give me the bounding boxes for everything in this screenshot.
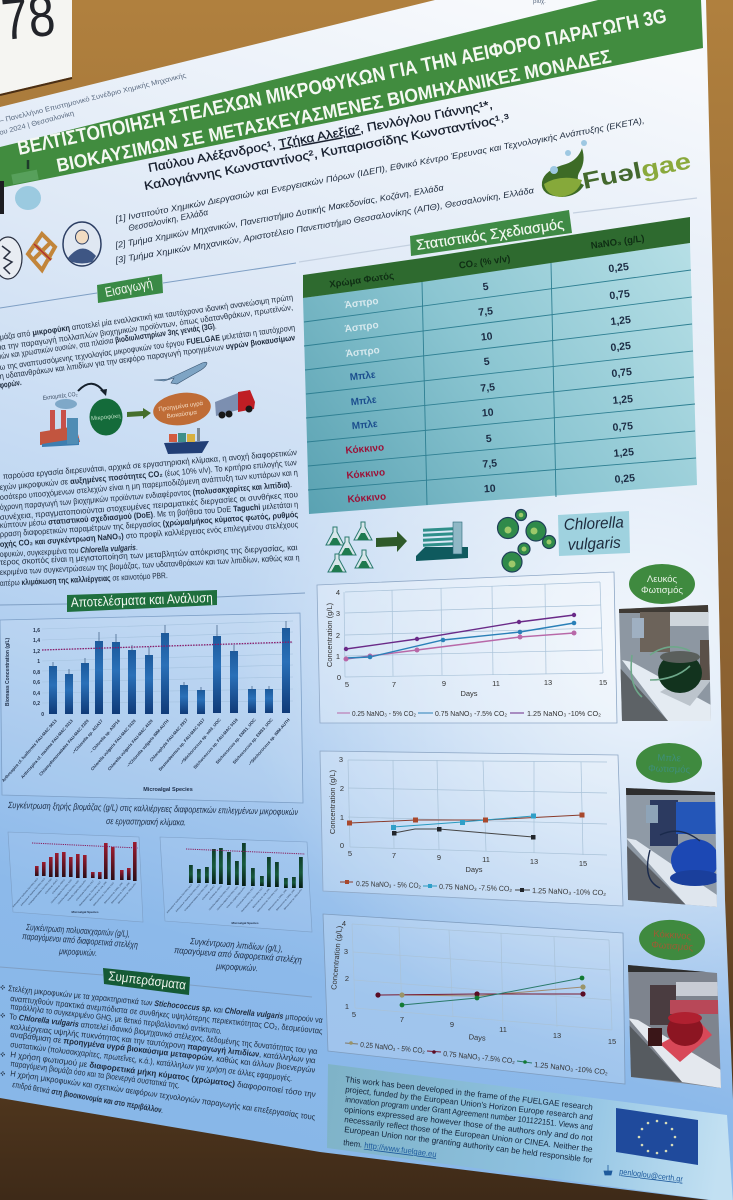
bar chart: biomass concentration: 1,6 <box>33 628 40 634</box>
label: blue lighting <box>636 743 702 783</box>
logo: Fuelgae: Fuəl gae <box>580 147 693 194</box>
bar chart: lipids: Chlorella sp. ASP14 <box>208 884 223 901</box>
text block: conclusions: επιδρά θετικά στη βιοοικονομία και στο περιβάλλον. <box>12 1080 164 1115</box>
table: statistical design: 10 <box>481 407 494 419</box>
photo: reactor blue light <box>626 788 717 907</box>
caption: lipids chart: Συγκέντρωση λιπιδίων (g/L), <box>189 936 283 954</box>
bar chart: polysaccharides <box>8 832 143 922</box>
text block: acknowledgement: opinions expressed are however those of the authors only and do not <box>344 1105 594 1143</box>
table: statistical design: Άσπρο <box>344 320 379 335</box>
text block: introduction paragraph 2: τερος σκοπός είναι η μεγιστοποίηση των μεταβλητών απόκρισης της διεργασίας, και <box>0 543 298 567</box>
logo: Fuelgae <box>542 140 693 197</box>
bar chart: polysaccharides: Chlorella vulgaris IMM-AUTH <box>67 879 87 902</box>
icon: truck <box>215 390 255 418</box>
table: statistical design: Χρώμα Φωτός <box>329 271 395 290</box>
process diagram: CO2 to biofuels: Εκπομπές CO₂ <box>42 391 79 402</box>
label: red lighting: Φωτισμός <box>651 940 694 953</box>
bar chart: biomass concentration: ~*Stichococcus sp. IMM-AUTH <box>247 717 291 767</box>
line chart: red lighting: Days <box>468 1032 486 1043</box>
note card with number <box>0 0 72 95</box>
heading: Statistical design: Στατιστικός Σχεδιασμός <box>415 217 565 254</box>
text block: introduction paragraph 2 <box>0 448 300 588</box>
line chart: red lighting: 0.25 NaNO₃ - 5% CO₂ <box>360 1040 425 1055</box>
text block: conclusions: Η χρήση μικροφυκών και σχετικών αειφόρων τεχνολογιών παραγωγής και επεξεργασίας τους <box>10 1069 316 1122</box>
text block: acknowledgement: them. http://www.fuelgae.eu <box>343 1138 438 1159</box>
table: statistical design <box>303 217 697 514</box>
line chart: white lighting: 7 <box>392 680 396 689</box>
table: statistical design: Μπλε <box>349 370 376 383</box>
text block: acknowledgement: necessarily reflect those of the European Union or CINEA. Neither the <box>344 1115 593 1154</box>
node: advanced biofuels <box>151 389 213 429</box>
bar chart: lipids: Chlorella vulgaris FAU-MAC 4120 <box>216 885 239 911</box>
line chart: red lighting: 3 <box>344 947 348 956</box>
bar chart: biomass concentration: 0,4 <box>33 691 40 697</box>
bar chart: biomass concentration: 1,2 <box>33 649 40 655</box>
line chart: red lighting: Concentration (g/L) <box>329 925 344 990</box>
table: statistical design: 10 <box>484 483 496 495</box>
line chart: red lighting <box>323 914 625 1084</box>
text block: introduction paragraph 1: ιών και χρωστικών ουσιών, στα πλαίσια βιοδιυλιστηρίων 3ης γενιάς (3G). <box>0 322 217 361</box>
heading: Introduction <box>0 263 296 308</box>
label: white lighting: Φωτισμός <box>641 585 683 596</box>
line chart: red lighting: 2 <box>345 974 349 983</box>
text block: conclusions: αναπτυχθούν πρακτικά ανεμπόδιστα σε συνθήκες υψηλότερης περιεκτικότητας CO₂, δεσμεύοντας <box>10 994 323 1036</box>
label: Chlorella vulgaris: Chlorella <box>563 514 624 534</box>
bar chart: lipids: Chlorella vulgaris IMM-AUTH <box>226 886 246 909</box>
text block: introduction paragraph 2: εχών μικροφυκών σε αυξημένες ποσότητες CO₂ (έως 10% v/v). Το κριτήριο επιλογής των <box>0 458 297 492</box>
text block: introduction paragraph 2: όχρονη παραγωγή των βιοχημικών προϊόντων ενδιαφέροντος (πολυσακχαρίτες και λιπίδια). <box>0 480 292 512</box>
table: statistical design: 0,75 <box>612 420 634 434</box>
bar chart: lipids <box>160 837 312 932</box>
text block: conclusions: συστατικών (πολυσακχαρίτες, πρωτεΐνες, κ.ά.), κατάλληλων για χρήση σε άλλες εφαρμογές. <box>10 1039 293 1083</box>
bar chart: polysaccharides: Stichococcus sp. IMM-AUTH <box>117 882 137 905</box>
text block: introduction paragraph 1: ια την παραγωγή πολλαπλών βιοχημικών προϊόντων, όπως υδατανθράκων, πρωτεϊνών, <box>0 303 294 352</box>
line chart: red lighting: 0.75 NaNO₃ -7.5% CO₂ <box>443 1049 515 1066</box>
label: white lighting: Λευκός <box>647 574 678 585</box>
line chart: white lighting: 5 <box>345 680 349 689</box>
text block: introduction paragraph 1: ω της αναπτυσσόμενης τεχνολογίας μικροφυκών του έργου FUELGAE μελετάται η ταυτόχρονη <box>0 323 296 372</box>
table: statistical design: CO₂ (% v/v) <box>458 253 511 272</box>
table: statistical design: 10 <box>480 330 493 344</box>
title banner: ΒΙΟΚΑΥΣΙΜΩΝ ΣΕ ΜΕΤΑΣΚΕΥΑΣΜΕΝΕΣ ΒΙΟΜΗΧΑΝΙΚΕΣ ΜΟΝΑΔΕΣ <box>55 47 613 177</box>
line chart: white lighting: 1 <box>336 652 340 661</box>
arrow: microalgae to biofuels <box>127 408 151 419</box>
affiliations <box>113 115 645 265</box>
label: white lighting <box>629 564 695 604</box>
line chart: white lighting: 15 <box>599 678 607 687</box>
text block: conclusions: Το Chlorella vulgaris αποτελεί ιδανικό βιομηχανικό στέλεχος, δεδομένης της δυνατότητας του για <box>9 1012 318 1056</box>
caption: polysaccharides chart: παραγόμενοι από διαφορετικά στελέχη <box>22 931 138 950</box>
text block: introduction paragraph 2: ρραση διαφορετικών παραμέτρων της διεργασίας (χρώμα/μήκος κύματος φωτός, ρυθμός <box>0 510 298 539</box>
line chart: white lighting: 4 <box>336 588 340 597</box>
caption: lipids chart: παραγόμενα από διαφορετικά στελέχη <box>174 945 302 965</box>
line chart: red lighting: 1.25 NaNO₃ -10% CO₂ <box>534 1060 608 1077</box>
table: statistical design: 1,25 <box>612 393 634 407</box>
table: statistical design: Άσπρο <box>344 296 379 311</box>
bar chart: lipids: Chlorophyta FAU-MAC 2917 <box>235 886 255 909</box>
bar chart: biomass concentration: Stichococcus sp. EMS1_UOC <box>214 717 257 765</box>
icon: factory <box>40 399 80 447</box>
line chart: red lighting: 9 <box>450 1020 454 1029</box>
table: statistical design: 5 <box>482 281 489 293</box>
bar chart: lipids: Arthrospira cf. fusiformis FAU-MAC 0613 <box>166 883 193 914</box>
bar chart: polysaccharides: Arthrospira cf. fusiformis FAU-MAC 0613 <box>12 877 39 908</box>
bar chart: biomass concentration: Chlorophyta FAU-MAC 2917 <box>148 717 189 763</box>
university logos <box>0 222 101 279</box>
icon: cargo ship <box>164 428 209 454</box>
bar chart: lipids: Arthrospira cf. maxima FAU-MAC 0313 <box>175 883 201 913</box>
bar chart: biomass concentration: 1,4 <box>33 638 40 644</box>
line chart: white lighting: 3 <box>336 609 340 618</box>
authors: Παύλου Αλέξανδρος¹, Τζήκα Αλεξία² , Πενλόγλου Γιάννης¹*, <box>147 97 494 175</box>
affiliations: [3] Τμήμα Χημικών Μηχανικών, Αριστοτέλειο Πανεπιστήμιο Θεσσαλονίκης (ΑΠΘ), Θεσσαλονίκη, Ελλάδα <box>114 185 536 265</box>
label: red lighting <box>638 918 706 962</box>
icon: flasks <box>326 522 373 572</box>
label: Chlorella vulgaris: vulgaris <box>567 535 621 554</box>
bar chart: biomass concentration: Stichococcus sp. EMS3_UOC <box>231 717 274 765</box>
text block: acknowledgement: This work has been developed in the frame of the FUELGAE research <box>345 1075 594 1112</box>
table: statistical design: 7,5 <box>478 305 494 319</box>
table: statistical design: 0,25 <box>610 340 632 354</box>
bar chart: lipids: Stichococcus sp. EMS3_UOC <box>275 888 296 911</box>
bar chart: biomass concentration: Chlamydomonadales FAU-MAC 2320 <box>38 718 90 777</box>
bar chart: biomass concentration <box>0 613 303 803</box>
table: statistical design: Κόκκινο <box>347 492 387 506</box>
caption: lipids chart <box>174 936 302 973</box>
label: red lighting: Κόκκινος <box>653 929 692 942</box>
table: statistical design: 5 <box>485 433 492 445</box>
caption: biomass chart <box>7 800 298 827</box>
icon: recycling and drop logo <box>0 160 41 214</box>
bar chart: polysaccharides: Desmodesmus sp. FAU-MAC 0117 <box>78 880 102 907</box>
caption: biomass chart: Συγκέντρωση ξηρής βιομάζας (g/L) στις καλλιέργειες διαφορετικών επιλεγμένων μικροφυκών <box>7 800 298 817</box>
icon: airplane <box>154 362 207 384</box>
bar chart: biomass concentration: Stichococcus sp. FAU-MAC 0119 <box>192 717 239 770</box>
line chart: blue lighting: 1.25 NaNO₃ -10% CO₂ <box>532 886 606 897</box>
table: statistical design: Κόκκινο <box>345 442 385 457</box>
bar chart: lipids: Desmodesmus sp. FAU-MAC 0117 <box>240 886 264 913</box>
bar chart: polysaccharides: Chlamydomonadales FAU-MAC 2320 <box>28 877 53 906</box>
text block: acknowledgement: project, funded by the European Union's Horizon Europe research and <box>345 1085 594 1122</box>
table: statistical design: 0,25 <box>608 261 630 275</box>
node: advanced biofuels: Προηγμένα υγρά <box>158 400 204 413</box>
affiliations: [1] Ινστιτούτο Χημικών Διεργασιών και Ενεργειακών Πόρων (ΙΔΕΠ), Εθνικό Κέντρο Έρευνας και Τεχνολογικής Ανάπτυξης (ΕΚΕΤΑ), <box>113 115 645 224</box>
line chart: white lighting <box>317 572 617 723</box>
line chart: blue lighting: 11 <box>482 855 490 864</box>
bar chart: polysaccharides: Microalgal Species <box>71 910 99 914</box>
bar chart: lipids: Chlorella vulgaris FAU-MAC 5120 <box>208 885 231 911</box>
bar chart: lipids: Stichococcus sp. IMM-AUTH <box>283 888 303 911</box>
line chart: white lighting: 13 <box>544 678 552 687</box>
caption: polysaccharides chart <box>22 922 138 958</box>
line chart: blue lighting: Days <box>465 865 483 874</box>
bar chart: lipids: Stichococcus sp. FAU-MAC 0119 <box>256 887 279 913</box>
line chart: red lighting: 4 <box>342 919 346 928</box>
bar chart: lipids: Stichococcus sp. EMS1_UOC <box>267 888 288 911</box>
table: statistical design: Άσπρο <box>345 345 380 360</box>
bar chart: lipids: Microalgal Species <box>231 921 259 925</box>
affiliations: Θεσσαλονίκη, Ελλάδα <box>127 207 210 233</box>
bar chart: biomass concentration: ~ Chlorella sp. ASP14 <box>89 718 121 754</box>
text block: introduction paragraph 1: μάζα από μικροφύκη αποτελεί μία εναλλακτική και ταυτόχρονα ιδανική ανανεώσιμη πρώτη <box>0 293 294 342</box>
icon: algae cells <box>498 510 556 572</box>
bar chart: polysaccharides: Stichococcus sp. EMS3_UOC <box>110 881 131 904</box>
line chart: red lighting: 13 <box>553 1031 561 1040</box>
line chart: blue lighting: 2 <box>340 784 344 793</box>
bar chart: polysaccharides: Chlorella vulgaris FAU-MAC 4120 <box>57 879 80 905</box>
line chart: white lighting: 2 <box>336 631 340 640</box>
line chart: white lighting: 0.25 NaNO₃ - 5% CO₂ <box>352 709 416 718</box>
bar chart: polysaccharides: Stichococcus sp. wild_UOC <box>89 880 108 902</box>
node: microalgae <box>90 398 122 436</box>
caption: polysaccharides chart: Συγκέντρωση πολυσακχαριτών (g/L), <box>25 922 130 939</box>
text block: conclusions: αναβάθμιση σε προηγμένα υγρά βιοκαύσιμα μεταφορών, καθώς και άλλων βιοενεργών <box>10 1030 316 1075</box>
heading: Introduction: Εισαγωγή <box>104 276 154 300</box>
line chart: blue lighting: 13 <box>530 857 538 866</box>
line chart: red lighting: 1 <box>345 1002 349 1011</box>
contact email: penloglou@certh.gr <box>619 1167 684 1184</box>
bar chart: biomass concentration: Chlorella vulgaris FAU-MAC 5120 <box>90 718 137 772</box>
table: statistical design: 1,25 <box>613 446 635 460</box>
node: microalgae: Μικροφύκη <box>91 414 121 422</box>
text block: introduction paragraph 2: κύπτουν μέσω στατιστικού σχεδιασμού (DoE). Με τη βοήθεια του DoE Taguchi μελετάται η <box>0 500 299 530</box>
line chart: white lighting: 0.75 NaNO₃ -7.5% CO₂ <box>435 709 507 718</box>
caption: lipids chart: μικροφυκών. <box>215 961 258 973</box>
line chart: red lighting: 7 <box>400 1015 404 1024</box>
bar chart: polysaccharides: Arthrospira cf. maxima FAU-MAC 0313 <box>20 877 46 907</box>
line chart: red lighting: 5 <box>352 1010 356 1019</box>
text block: introduction paragraph 2: αιτέρω κλιμάκωση της καλλιέργειας σε καινοτόμο PBR. <box>0 571 168 588</box>
bar chart: biomass concentration: Arthrospira cf. fusiformis FAU-MAC 0613 <box>1 718 58 783</box>
icon: EU flag <box>616 1108 698 1165</box>
bar chart: polysaccharides: Chlorella sp. ASP14 <box>51 878 66 895</box>
text block: acknowledgement: European Union nor the granting authority can be held responsible for <box>344 1125 593 1165</box>
bar chart: biomass concentration: ~*Chlorella sp. AGA17 <box>71 718 104 755</box>
line chart: blue lighting: 9 <box>437 853 441 862</box>
text block: acknowledgement: innovation program under Grant Agreement number 101122151. Views and <box>345 1095 594 1132</box>
bar chart: biomass concentration: 0,8 <box>33 670 40 676</box>
label: blue lighting: Φωτισμός <box>648 763 691 776</box>
bar chart: biomass concentration: 0,6 <box>33 680 40 686</box>
icon: photobioreactor <box>416 522 468 561</box>
text block: introduction paragraph 2: παρούσα εργασία διερευνάται, αρχικά σε εργαστηριακή κλίμακα, η ανοχή διαφορετικών <box>2 448 297 481</box>
text block: introduction paragraph 1 <box>0 293 296 390</box>
line chart: blue lighting: 0.25 NaNO₃ - 5% CO₂ <box>356 879 421 890</box>
bar chart: biomass concentration: Desmodesmus sp. FAU-MAC 0117 <box>158 717 206 772</box>
heading: Results and analysis <box>0 590 305 612</box>
text block: introduction paragraph 2: συνέχεια, πραγματοποιούνται στοχευμένες πειραματικές διεργασίες οι συνθήκες που <box>0 490 299 522</box>
table: statistical design: 1,25 <box>610 314 632 328</box>
table: statistical design: 0,75 <box>611 366 633 380</box>
bar chart: biomass concentration: 0 <box>41 712 44 718</box>
line chart: blue lighting: Concentration (g/L) <box>328 769 337 834</box>
text block: conclusions <box>0 984 323 1122</box>
bar chart: biomass concentration: 0,2 <box>33 701 40 707</box>
bar chart: polysaccharides: Stichococcus sp. EMS1_UOC <box>103 881 124 904</box>
text block: introduction paragraph 2: οσότερο υποσχόμενων στελεχών είναι η μη παρεμποδιζόμενη ανάπτυξη των κυττάρων και η <box>0 468 299 502</box>
line chart: blue lighting: 0 <box>340 841 344 850</box>
bar chart: biomass concentration: Arthrospira cf. maxima FAU-MAC 0313 <box>20 718 74 779</box>
line chart: white lighting: Days <box>460 689 478 698</box>
bar chart: polysaccharides: Chlorella sp. AGA17 <box>44 878 59 895</box>
conference header text: – Πανελλήνιο Επιστημονικό Συνέδριο Χημικής Μηχανικής <box>0 71 188 125</box>
text block: introduction paragraph 2: οχής CO₂ και συγκέντρωση NaNO₃) στο προφίλ καλλιέργειας ενός επιλεγμένου στελέχους <box>0 520 299 549</box>
line chart: blue lighting <box>320 751 623 906</box>
bar chart: biomass concentration: Chlorella vulgaris FAU-MAC 4120 <box>107 718 154 772</box>
node: advanced biofuels: Βιοκαύσιμα <box>166 410 198 420</box>
text block: conclusions: Στελέχη μικροφυκών με τα χαρακτηριστικά των Stichococcus sp. και Chlorella vulgaris μπορούν να <box>8 984 323 1025</box>
bar chart: biomass concentration: ~*Chlorella vulgaris IMM-AUTH <box>126 718 170 768</box>
bar chart: biomass concentration: 1 <box>37 659 40 665</box>
bar chart: biomass concentration: Biomass Concentration (g/L) <box>5 637 11 706</box>
line chart: blue lighting: 1 <box>340 813 344 822</box>
conference header text: ου 2024 | Θεσσαλονίκη <box>0 109 75 137</box>
conference header text <box>0 0 546 137</box>
line chart: blue lighting: 7 <box>392 851 396 860</box>
arrow: flasks to reactor <box>376 531 407 552</box>
table: statistical design: 7,5 <box>480 381 496 395</box>
bar chart: polysaccharides: Chlorophyta FAU-MAC 2917 <box>75 879 95 902</box>
affiliations: [2] Τμήμα Χημικών Μηχανικών, Πανεπιστήμιο Δυτικής Μακεδονίας, Κοζάνη, Ελλάδα <box>114 182 445 250</box>
bar chart: lipids: Stichococcus sp. wild_UOC <box>252 887 271 909</box>
caption: polysaccharides chart: μικροφυκών. <box>58 946 97 958</box>
text block: conclusions: παραγόμενη βιομάζα όσο και τα βιοενεργά συστατικά της. <box>10 1059 180 1090</box>
line chart: white lighting: 1.25 NaNO₃ -10% CO₂ <box>527 709 601 718</box>
bar chart: lipids: Chlamydomonadales FAU-MAC 2320 <box>184 883 209 912</box>
photo: reactor white light <box>619 605 711 721</box>
photo: reactor red light <box>628 965 721 1088</box>
text block: introduction paragraph 2: εκριμένα των συγκεντρώσεων της βιομάζας, των υδατανθράκων και των λιπιδίων, καθώς και η <box>0 553 300 577</box>
line chart: blue lighting: 5 <box>348 849 352 858</box>
separator lines under header <box>299 198 697 262</box>
text block: conclusions: καλλιέργειας υψηλής πυκνότητας και την ταυτόχρονη παραγωγή λιπιδίων, κατάλληλων για <box>10 1022 316 1065</box>
line chart: red lighting: 15 <box>608 1037 616 1046</box>
line chart: white lighting: Concentration (g/L) <box>325 602 334 667</box>
label: blue lighting: Μπλε <box>657 753 682 764</box>
bar chart: lipids: Chlorella sp. AGA17 <box>201 884 216 901</box>
arrow: emissions to microalgae <box>78 384 107 396</box>
panel: funding acknowledgement <box>327 1064 733 1200</box>
text block: introduction paragraph 1: η υδατανθράκων και λιπιδίων για την αειφόρο παραγωγή προηγμένων υγρών βιοκαυσίμων <box>0 333 296 381</box>
line chart: blue lighting: 3 <box>339 755 343 764</box>
table: statistical design: Κόκκινο <box>346 467 386 482</box>
table: statistical design: 7,5 <box>482 457 498 471</box>
line chart: white lighting: 0 <box>337 673 341 682</box>
table: statistical design: Μπλε <box>350 395 377 408</box>
process diagram: CO2 to biofuels <box>40 362 255 454</box>
table: statistical design: Μπλε <box>351 419 378 432</box>
line chart: blue lighting: 0.75 NaNO₃ -7.5% CO₂ <box>439 882 512 893</box>
bar chart: polysaccharides: Chlorella vulgaris FAU-MAC 5120 <box>50 878 73 904</box>
contact email <box>604 1165 684 1184</box>
bar chart: polysaccharides: Stichococcus sp. FAU-MAC 0119 <box>92 881 115 907</box>
line chart: blue lighting: 15 <box>579 859 587 868</box>
heading: Conclusions <box>0 967 312 997</box>
line chart: white lighting: 9 <box>442 679 446 688</box>
text block: conclusions: Η χρήση φωτισμού με διαφορετικά μήκη κύματος (χρώματος) διαφοροποιεί τόσο την <box>10 1050 316 1099</box>
table: statistical design: 5 <box>483 356 490 368</box>
heading: Results and analysis: Αποτελέσματα και Ανάλυση <box>71 590 213 610</box>
heading: Conclusions: Συμπεράσματα <box>108 968 187 993</box>
table: statistical design: 0,75 <box>609 288 631 302</box>
text block: introduction paragraph 2: οφυκών, συγκεκριμένα του Chlorella vulgaris. <box>0 543 138 559</box>
caption: biomass chart: σε εργαστηριακή κλίμακα. <box>106 816 186 827</box>
bar chart: biomass concentration: ~*Stichococcus sp. wild_UOC <box>179 717 222 766</box>
table: statistical design: 0,25 <box>614 472 636 486</box>
line chart: red lighting: 11 <box>499 1025 507 1034</box>
text block: acknowledgement <box>343 1075 594 1165</box>
text block: conclusions: παράλληλα το συγκεκριμένο GHG, με θετικό περιβαλλοντικό αντίκτυπο. <box>10 1002 222 1036</box>
table: statistical design: NaNO₃ (g/L) <box>590 233 645 252</box>
line chart: white lighting: 11 <box>492 679 500 688</box>
authors: Καλογιάννης Κωνσταντίνος², Κυπαρισσίδης Κωνσταντίνος¹˒³ <box>143 111 510 193</box>
bar chart: biomass concentration: Microalgal Species <box>143 787 193 793</box>
label: Chlorella vulgaris <box>558 511 630 556</box>
